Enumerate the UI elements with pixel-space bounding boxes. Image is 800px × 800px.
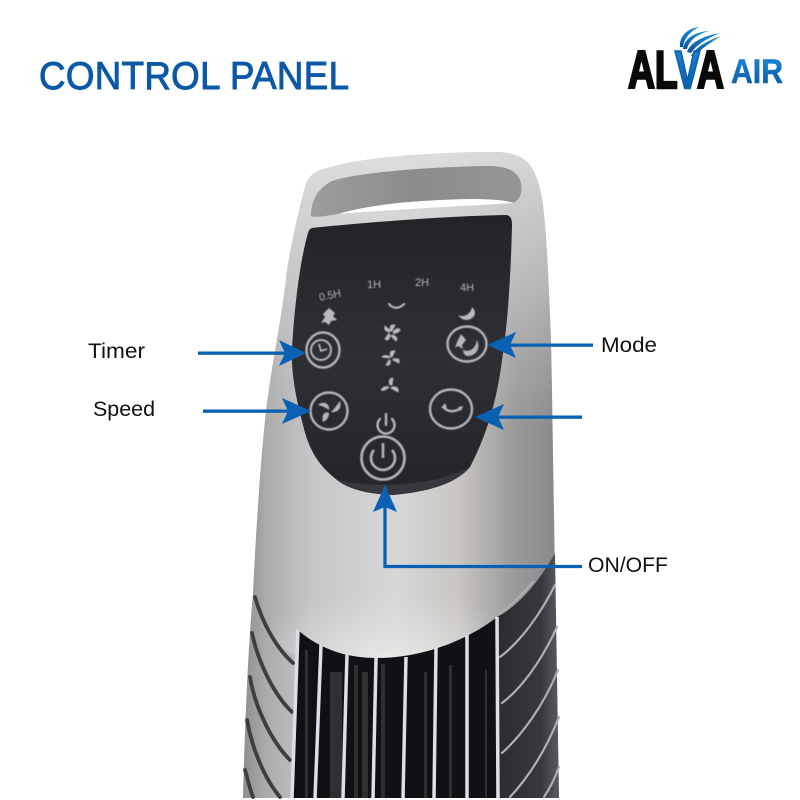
timer labels — [318, 277, 474, 304]
button: power — [362, 436, 404, 480]
body top shading — [258, 152, 553, 520]
logo: Alva Air — [628, 27, 783, 100]
label: on/off: ON/OFF — [588, 554, 668, 577]
arrow: speed — [203, 398, 311, 424]
carry handle opening — [311, 166, 522, 217]
arrow: swing — [475, 404, 582, 430]
icon: fan high — [385, 325, 400, 341]
timer labels: 0.5H — [318, 288, 342, 304]
panel lower reflection — [337, 467, 470, 495]
panel markings — [306, 277, 486, 480]
handle white slit — [338, 199, 514, 214]
logo feathers — [680, 27, 721, 57]
icon: eco tree — [321, 308, 337, 325]
button: swing — [430, 390, 472, 428]
icon: fan low — [381, 378, 398, 392]
fan tower product photo — [243, 152, 559, 798]
arrow: on/off — [373, 485, 582, 566]
control panel glass — [292, 215, 512, 495]
right side slats — [497, 553, 559, 798]
tower body — [243, 152, 559, 798]
arrow: timer — [198, 340, 306, 366]
logo wordmark: ALVA — [628, 41, 724, 100]
lower dome highlight — [255, 535, 525, 675]
icon: swing arc — [389, 304, 404, 308]
timer labels: 4H — [460, 282, 474, 294]
icon: small power symbol — [377, 414, 394, 434]
icon: sleep moon — [458, 307, 475, 320]
button: speed — [310, 392, 348, 430]
label: timer: Timer — [88, 340, 145, 363]
vent white bars — [292, 617, 498, 798]
panel icons — [321, 304, 475, 434]
vent inner glints — [305, 650, 487, 798]
label: mode: Mode — [601, 334, 657, 357]
title: CONTROL PANEL — [39, 55, 349, 98]
button: mode — [448, 326, 486, 362]
timer labels: 1H — [367, 279, 381, 291]
label: speed: Speed — [93, 398, 155, 421]
timer labels: 2H — [415, 277, 429, 289]
central vent grille — [292, 617, 498, 798]
arrow: mode — [487, 332, 593, 358]
left side slats — [245, 597, 293, 797]
icon: fan medium — [382, 351, 399, 365]
button: timer — [306, 332, 340, 368]
logo AIR: AIR — [731, 53, 783, 91]
